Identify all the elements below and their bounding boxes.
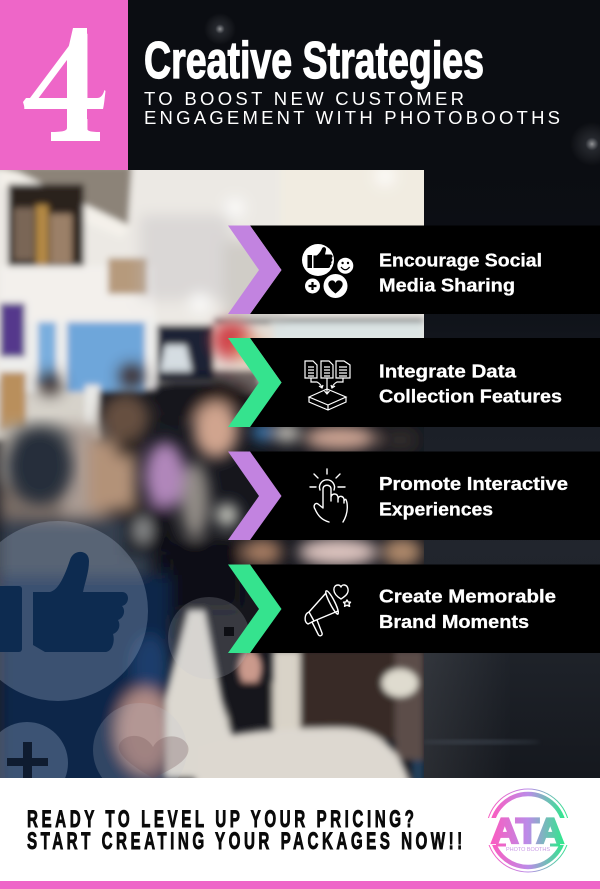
banner background	[250, 452, 600, 540]
label	[379, 361, 562, 407]
panel: strategy 1 social media sharing	[228, 226, 600, 314]
title	[144, 32, 560, 128]
call to action text	[27, 807, 462, 855]
icon: faded smiley bubble	[168, 597, 250, 679]
chevron	[228, 564, 282, 653]
icon: tapping hand	[310, 469, 347, 522]
label: Media Sharing	[379, 275, 515, 296]
label: Create Memorable	[379, 586, 556, 607]
banner background	[250, 564, 600, 653]
label: Promote Interactive	[379, 473, 568, 494]
label: Collection Features	[379, 386, 562, 407]
panel: strategy 2 data collection	[228, 338, 600, 427]
label: Integrate Data	[379, 361, 517, 382]
label	[379, 473, 568, 520]
photo: blurred crowd at an expo	[0, 160, 434, 804]
label: Brand Moments	[379, 611, 529, 632]
banner background	[250, 226, 600, 314]
logo: ATA Photo Booths: ATA	[491, 812, 564, 851]
call to action text: READY TO LEVEL UP YOUR PRICING?	[27, 807, 414, 833]
panel: footer call to action	[0, 778, 600, 889]
panel: strategy 3 interactive experiences	[228, 452, 600, 540]
label	[379, 586, 556, 632]
chevron	[228, 452, 282, 540]
label	[379, 250, 542, 296]
icon: faded thumbs-up bubble	[0, 521, 148, 701]
panel: number badge	[0, 0, 128, 174]
panel: number badge: 4	[21, 0, 105, 174]
label: Encourage Social	[379, 250, 542, 271]
icon: megaphone with heart and star	[305, 585, 350, 636]
icon: documents into tray	[305, 361, 350, 410]
head of visitor in foreground	[7, 424, 73, 504]
banner background	[250, 338, 600, 427]
label: Experiences	[379, 499, 493, 520]
chevron	[228, 226, 282, 314]
call to action text: START CREATING YOUR PACKAGES NOW!!	[27, 829, 462, 855]
logo: ATA Photo Booths: PHOTO BOOTHS	[506, 847, 550, 853]
icon: faded heart bubble	[93, 703, 188, 778]
icon: faded plus bubble	[0, 722, 68, 778]
panel: strategy 4 brand moments	[228, 564, 600, 653]
chevron	[228, 338, 282, 427]
title: ENGAGEMENT WITH PHOTOBOOTHS	[144, 107, 560, 128]
icon: social reactions	[302, 244, 353, 298]
title: TO BOOST NEW CUSTOMER	[144, 88, 464, 109]
logo: ATA Photo Booths	[484, 789, 572, 872]
